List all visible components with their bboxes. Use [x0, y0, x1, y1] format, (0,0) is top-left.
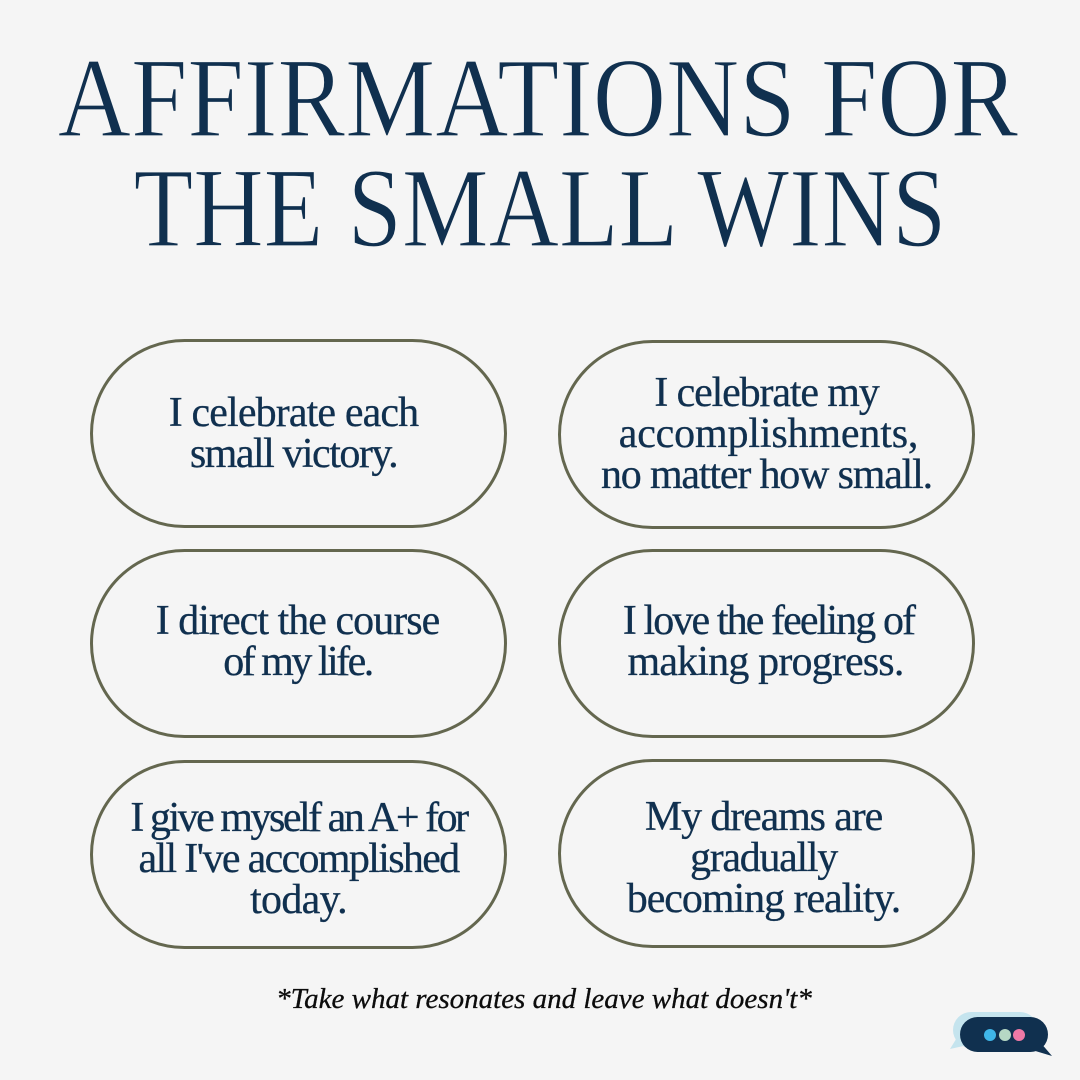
title: AFFIRMATIONS FOR	[58, 36, 1018, 161]
panel: My dreams are gradually becoming reality: gradually	[690, 835, 837, 881]
panel: I direct the course of my life: of my life.	[223, 639, 372, 685]
panel: I celebrate each small victory: I celebrate each	[169, 390, 418, 436]
icon: chat bubbles	[950, 1012, 1052, 1056]
panel: I give myself an A+: all I've accomplished	[138, 836, 459, 882]
panel: I celebrate my accomplishments: accomplishments,	[619, 411, 918, 457]
panel: I give myself an A+: today.	[250, 877, 347, 923]
panel: My dreams are gradually becoming reality: My dreams are	[645, 794, 882, 840]
panel: I celebrate my accomplishments	[558, 340, 975, 529]
panel: I love the feeling of making progress: I love the feeling of	[623, 598, 914, 644]
panel: I give myself an A+: I give myself an A+ for	[130, 795, 467, 841]
panel: I direct the course of my life	[90, 549, 507, 738]
panel: I celebrate each small victory	[90, 339, 507, 528]
panel: I love the feeling of making progress: making progress.	[627, 639, 904, 685]
panel: I celebrate each small victory: small victory.	[190, 431, 397, 477]
panel: I give myself an A+	[90, 760, 507, 949]
footnote: *Take what resonates and leave what doesn't*	[276, 983, 812, 1015]
panel: I celebrate my accomplishments: I celebrate my	[654, 370, 879, 416]
title: THE SMALL WINS	[134, 146, 946, 271]
panel: My dreams are gradually becoming reality	[558, 759, 975, 948]
panel: I love the feeling of making progress	[558, 549, 975, 738]
panel: My dreams are gradually becoming reality: becoming reality.	[627, 876, 900, 922]
panel: I celebrate my accomplishments: no matter how small.	[601, 452, 932, 498]
panel: I direct the course of my life: I direct the course	[156, 598, 439, 644]
title	[58, 36, 1018, 271]
